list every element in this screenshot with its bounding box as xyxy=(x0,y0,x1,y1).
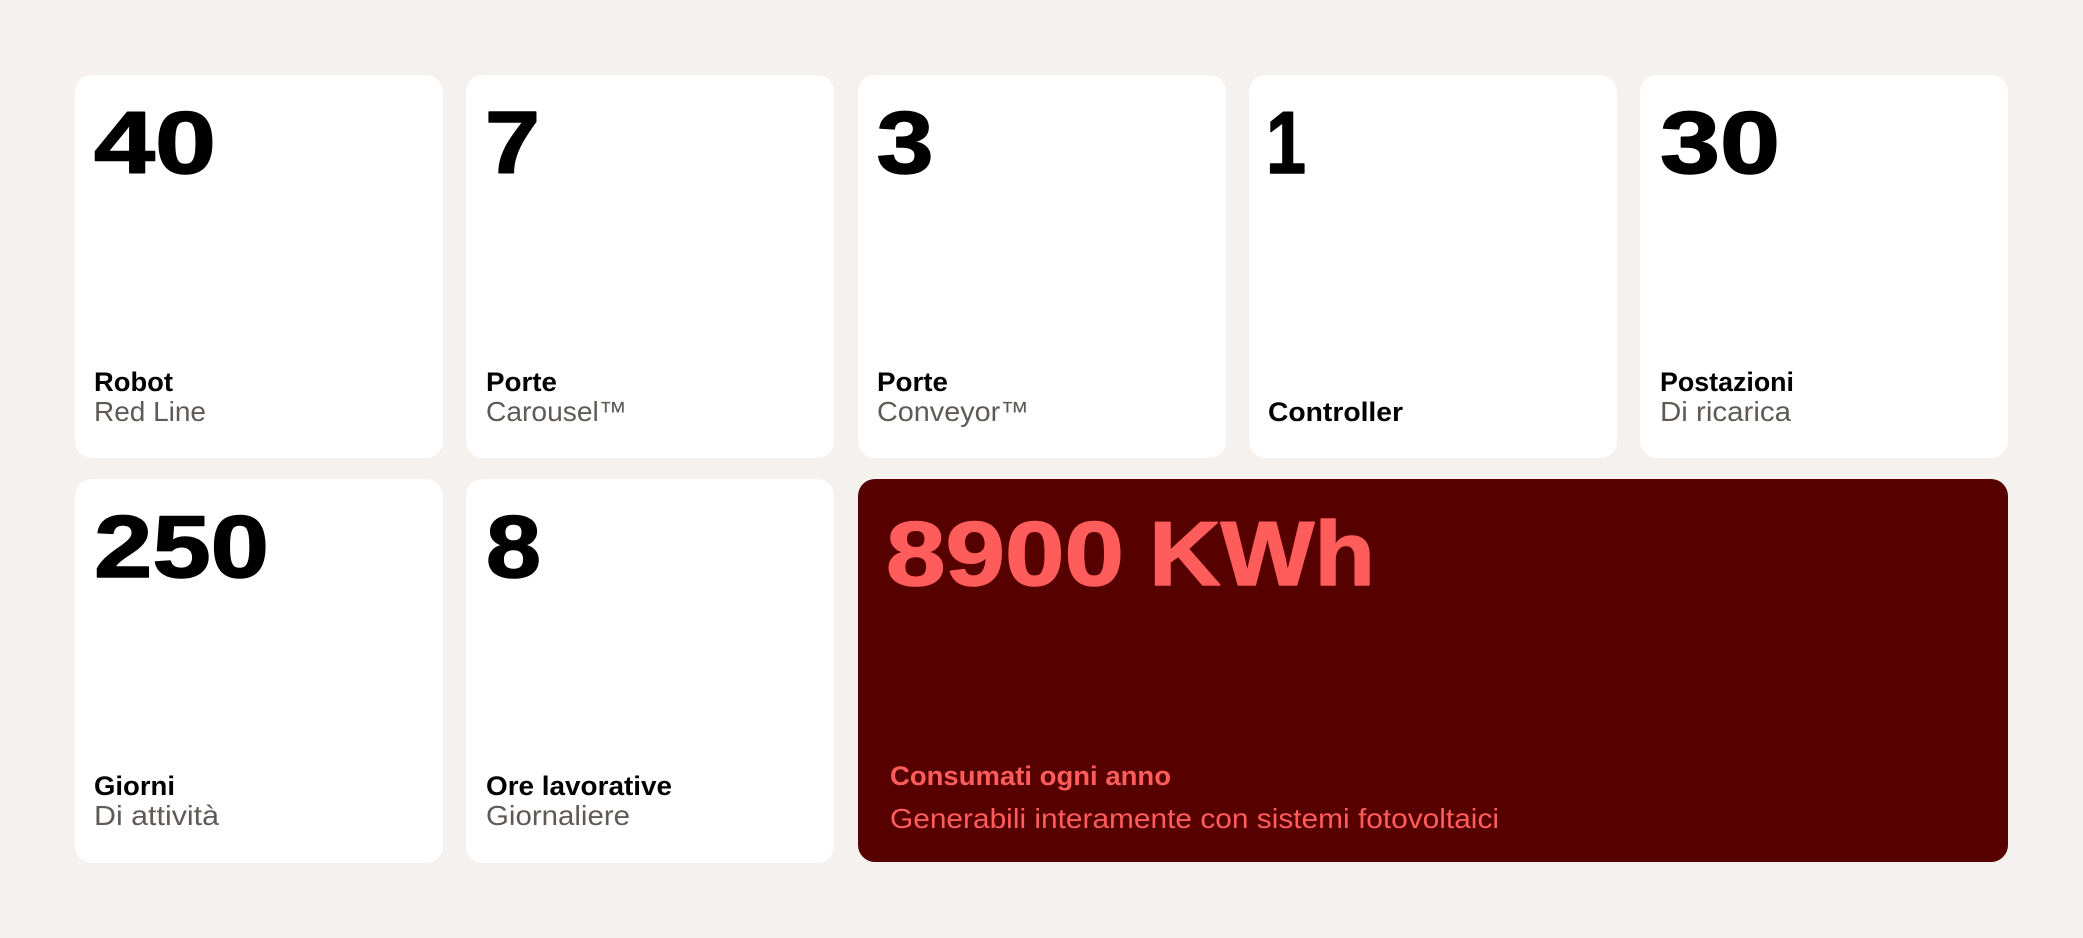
sublabel: Generabili interamente con sistemi fotovoltaici: Generabili interamente con sistemi fotovoltaici xyxy=(890,803,1499,834)
number: 7: 7 xyxy=(485,93,540,192)
sublabel: Giornaliere: Giornaliere xyxy=(486,800,630,831)
panel: 250 giorni xyxy=(75,479,443,863)
panel: 8900 KWh energy xyxy=(858,479,2008,862)
number: 1: 1 xyxy=(1266,93,1306,192)
label: Postazioni: Postazioni xyxy=(1660,367,1794,397)
sublabel: Red Line: Red Line xyxy=(94,396,206,427)
label: Giorni: Giorni xyxy=(94,771,175,801)
number: 8900 KWh: 8900 xyxy=(886,504,1124,605)
number: 8900 KWh: KWh xyxy=(1149,504,1375,605)
label: Ore lavorative: Ore lavorative xyxy=(486,771,672,801)
number: 40: 40 xyxy=(94,93,216,192)
label: Robot: Robot xyxy=(94,367,173,397)
sublabel: Di attività: Di attività xyxy=(94,800,219,831)
label: Porte: Porte xyxy=(486,367,557,397)
number: 30: 30 xyxy=(1660,93,1780,192)
number: 250: 250 xyxy=(94,497,269,596)
panel: 7 porte carousel xyxy=(466,75,834,458)
panel: 30 postazioni xyxy=(1640,75,2008,458)
sublabel: Di ricarica: Di ricarica xyxy=(1660,396,1791,427)
panel: 1 controller xyxy=(1249,75,1617,458)
panel: 8 ore lavorative xyxy=(466,479,834,863)
panel: 3 porte conveyor xyxy=(858,75,1226,458)
number: 8: 8 xyxy=(486,497,541,596)
label: Consumati ogni anno: Consumati ogni anno xyxy=(890,761,1171,791)
sublabel: Carousel: Carousel™ xyxy=(486,396,627,427)
number: 8900 KWh xyxy=(886,504,1375,605)
sublabel: Conveyor: Conveyor™ xyxy=(877,396,1029,427)
label: Porte: Porte xyxy=(877,367,948,397)
label: Controller: Controller xyxy=(1268,397,1404,427)
number: 3: 3 xyxy=(876,93,934,192)
panel: 40 robot xyxy=(75,75,443,458)
